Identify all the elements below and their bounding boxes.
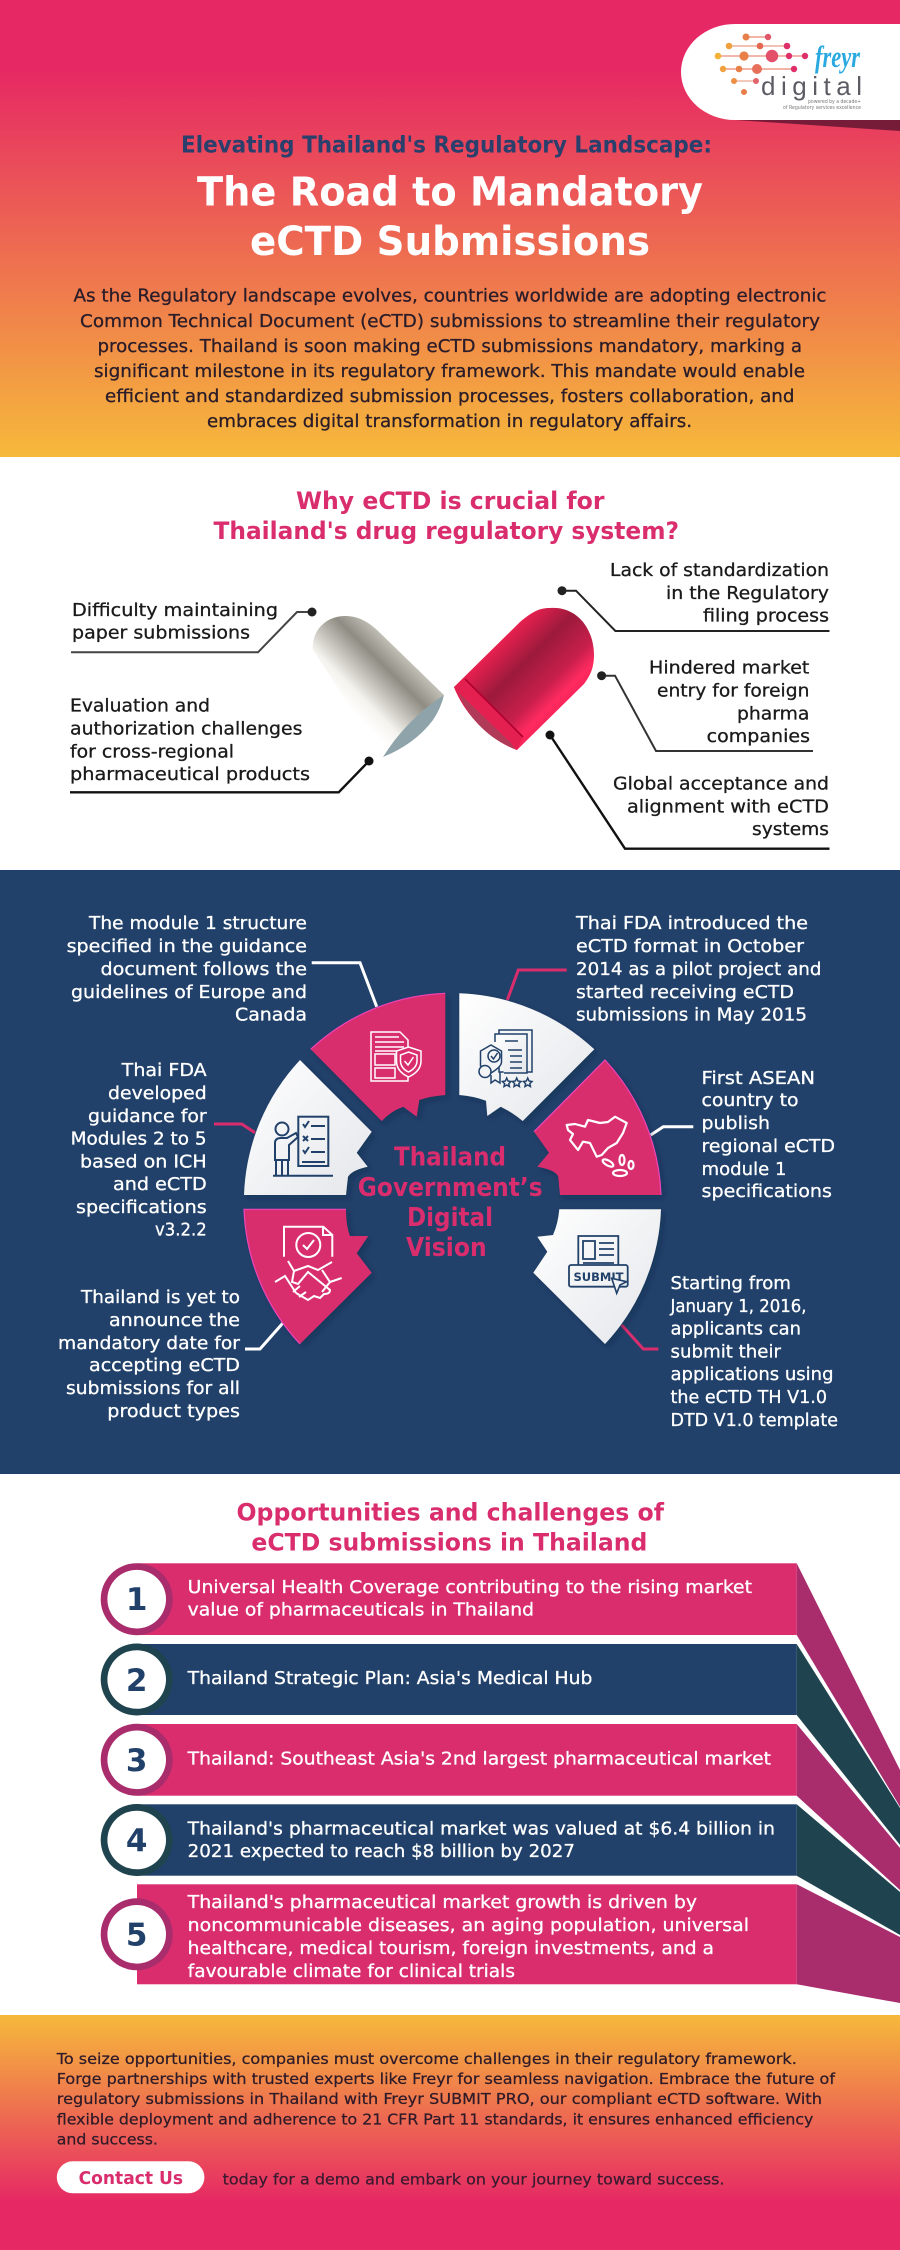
text: module 1 structure: specified in the guidance [67,936,307,957]
logo: freyr digital: freyr [815,39,861,74]
text: starting January 2016: applications using [670,1364,834,1385]
callout: lack of standardization: filing process [703,606,829,627]
connector lines [214,963,693,1349]
wheel segment: guidance presenter [244,1060,372,1195]
wheel title: Thailand [394,1143,506,1173]
callout: difficulty maintaining paper: paper submissions [72,623,250,644]
title: The Road to Mandatory [197,170,703,216]
item 2: 2 [126,1663,147,1699]
text: mandatory date: accepting eCTD [89,1355,240,1376]
heading: opportunities [236,1499,665,1557]
text: mandatory date [58,1287,241,1422]
button: contact us: Contact Us [79,2168,183,2189]
item 4 [101,1804,900,1935]
text: Thai FDA guidance: guidance for [88,1106,207,1127]
text: module 1 structure: The module 1 structure [88,913,307,934]
closing paragraph: flexible deployment and adherence to 21 CFR Part 11 standards, it ensures enhanced efficiency [57,2110,813,2128]
closing paragraph: Forge partnerships with trusted experts like Freyr for seamless navigation. Embrace the future of [57,2070,836,2088]
logo: freyr digital: of Regulatory services excellence [783,105,861,111]
heading: why eCTD [214,487,679,545]
callout: lack of standardization: Lack of standardization [610,560,829,581]
panel: opportunities and challenges [0,1474,900,2015]
wheel segment: handshake [244,1209,372,1344]
item 2 [101,1644,900,1845]
wheel title [358,1143,543,1263]
item 5: favourable climate for clinical trials [188,1961,515,1982]
icon: white capsule half [313,616,444,757]
text: Thai FDA guidance: based on ICH [80,1152,207,1173]
text: Thai FDA introduced: eCTD format in October [576,936,805,957]
text: Thai FDA guidance: v3.2.2 [155,1220,207,1241]
item 3: Thailand: Southeast Asia's 2nd largest pharmaceutical market [187,1748,771,1769]
intro paragraph: Common Technical Document (eCTD) submissions to streamline their regulatory [80,311,820,332]
panel: footer call to action [0,2015,900,2250]
wheel title: Government’s [358,1173,543,1203]
text: starting January 2016: the eCTD TH V1.0 [670,1387,827,1408]
closing line: today for a demo and embark on your journey toward success. [223,2171,724,2189]
item 3: 3 [126,1743,147,1779]
callout: evaluation and authorization: Evaluation and [70,696,210,717]
callout: global acceptance: systems [752,819,829,840]
text: module 1 structure: document follows the [100,959,307,980]
callout: hindered market entry: Hindered market [649,658,809,679]
callout: difficulty maintaining paper [71,600,316,652]
item 1: Universal Health Coverage contributing to the rising market [188,1577,752,1598]
callout: difficulty maintaining paper: Difficulty maintaining [72,600,278,621]
text: first ASEAN country: publish [702,1113,770,1134]
icon: red capsule half [454,608,594,750]
icon: document and shield [371,1032,421,1081]
callout: evaluation and authorization: pharmaceutical products [70,764,310,785]
item 2: Thailand Strategic Plan: Asia's Medical Hub [187,1668,592,1689]
item 4: Thailand's pharmaceutical market was valued at $6.4 billion in [187,1818,775,1839]
text: mandatory date: submissions for all [66,1378,240,1399]
text: module 1 structure [67,913,307,1026]
item 4: 4 [126,1823,147,1859]
text: Thai FDA introduced: started receiving eCTD [576,982,794,1003]
text: first ASEAN country: country to [702,1090,798,1111]
text: Thai FDA guidance: and eCTD [113,1174,207,1195]
heading: opportunities: Opportunities and challenges of [236,1499,665,1527]
intro paragraph: As the Regulatory landscape evolves, countries worldwide are adopting electronic [74,286,826,306]
heading: why eCTD: Why eCTD is crucial for [296,487,605,515]
wheel segment: shield document [311,993,445,1121]
callout: hindered market entry: pharma [737,703,809,724]
text: Thai FDA introduced: 2014 as a pilot project and [576,959,822,980]
wheel title: Digital [407,1203,493,1233]
item 1: value of pharmaceuticals in Thailand [188,1600,534,1621]
item 1: 1 [126,1582,147,1618]
text: mandatory date: announce the [109,1310,240,1331]
item 5: Thailand's pharmaceutical market growth is driven by [187,1892,697,1913]
text: Thai FDA guidance: Modules 2 to 5 [71,1129,207,1150]
heading: opportunities: eCTD submissions in Thailand [251,1529,647,1557]
text: Thai FDA introduced [575,913,822,1026]
callout: evaluation and authorization: for cross-regional [70,742,234,762]
text: Thai FDA guidance: Thai FDA [121,1060,207,1081]
callout: evaluation and authorization: authorization challenges [70,719,302,740]
item 5: 5 [126,1918,147,1954]
callout: global acceptance [546,730,830,849]
icon: map of asia [567,1117,634,1176]
item 5: healthcare, medical tourism, foreign investments, and a [188,1938,714,1959]
text: Thai FDA introduced: submissions in May 2015 [576,1004,807,1026]
text: starting January 2016 [670,1273,838,1431]
item 5 [101,1884,900,2003]
text: starting January 2016: DTD V1.0 template [670,1410,838,1431]
callout: global acceptance: Global acceptance and [613,774,829,795]
text: first ASEAN country: First ASEAN [702,1068,815,1089]
text: first ASEAN country: specifications [702,1181,832,1202]
text: first ASEAN country: module 1 [702,1159,786,1180]
wheel segment: certified documents [459,993,594,1121]
item 5: noncommunicable diseases, an aging population, universal [188,1915,749,1936]
panel: why eCTD is crucial [0,457,900,870]
callout: lack of standardization [558,560,830,631]
icon: submit form: SUBMIT [574,1270,624,1284]
wheel segment: submit [533,1209,661,1344]
text: Thai FDA guidance [71,1060,207,1241]
title: eCTD Submissions [250,219,650,265]
text: Thai FDA guidance: developed [108,1083,207,1104]
callout: hindered market entry: companies [707,726,810,747]
text: module 1 structure: Canada [235,1004,307,1026]
callout: lack of standardization: in the Regulatory [666,583,829,604]
title [197,170,703,265]
button: contact us [57,2161,204,2193]
icon: certified documents [479,1030,532,1086]
text: first ASEAN country [702,1068,835,1202]
text: Thai FDA guidance: specifications [76,1197,207,1218]
text: mandatory date: mandatory date for [58,1333,241,1354]
heading: why eCTD: Thailand's drug regulatory system? [214,517,679,545]
text: first ASEAN country: regional eCTD [702,1136,835,1157]
wheel segment: asean map [534,1060,661,1195]
icon: handshake and approved document [275,1227,342,1300]
subtitle: Elevating Thailand's Regulatory Landscape: [181,132,712,158]
item 3 [101,1724,900,1890]
intro paragraph: embraces digital transformation in regulatory affairs. [207,411,692,432]
closing paragraph: and success. [57,2130,158,2148]
logo: freyr digital: digital [761,71,862,101]
text: module 1 structure: guidelines of Europe and [71,982,307,1003]
panel: header [0,0,900,457]
wheel title: Vision [406,1233,487,1263]
text: mandatory date: Thailand is yet to [80,1287,240,1308]
icon: presenter at checklist [273,1117,333,1176]
logo: freyr digital: powered by a decade+ [808,99,861,105]
text: starting January 2016: January 1, 2016, [670,1296,806,1317]
logo: freyr digital [681,24,900,131]
intro paragraph: processes. Thailand is soon making eCTD submissions mandatory, marking a [98,336,802,357]
text: starting January 2016: applicants can [670,1318,801,1340]
text: mandatory date: product types [107,1401,240,1422]
text: Thai FDA introduced: Thai FDA introduced the [575,913,808,934]
item 4: 2021 expected to reach $8 billion by 2027 [188,1841,575,1862]
item 1 [101,1563,900,1807]
callout: hindered market entry: entry for foreign [657,681,809,702]
closing paragraph: regulatory submissions in Thailand with Freyr SUBMIT PRO, our compliant eCTD software. With [57,2090,822,2108]
callout: hindered market entry [597,658,813,751]
intro paragraph: significant milestone in its regulatory framework. This mandate would enable [94,361,805,382]
text: starting January 2016: Starting from [670,1273,791,1294]
text: starting January 2016: submit their [670,1341,782,1362]
closing paragraph [56,2050,836,2148]
closing paragraph: To seize opportunities, companies must overcome challenges in their regulatory framework. [56,2050,797,2068]
intro paragraph: efficient and standardized submission processes, fosters collaboration, and [105,386,794,407]
panel: government digital vision [0,870,900,1474]
callout: global acceptance: alignment with eCTD [627,796,829,817]
callout: evaluation and authorization [70,696,374,792]
intro paragraph [74,286,826,432]
